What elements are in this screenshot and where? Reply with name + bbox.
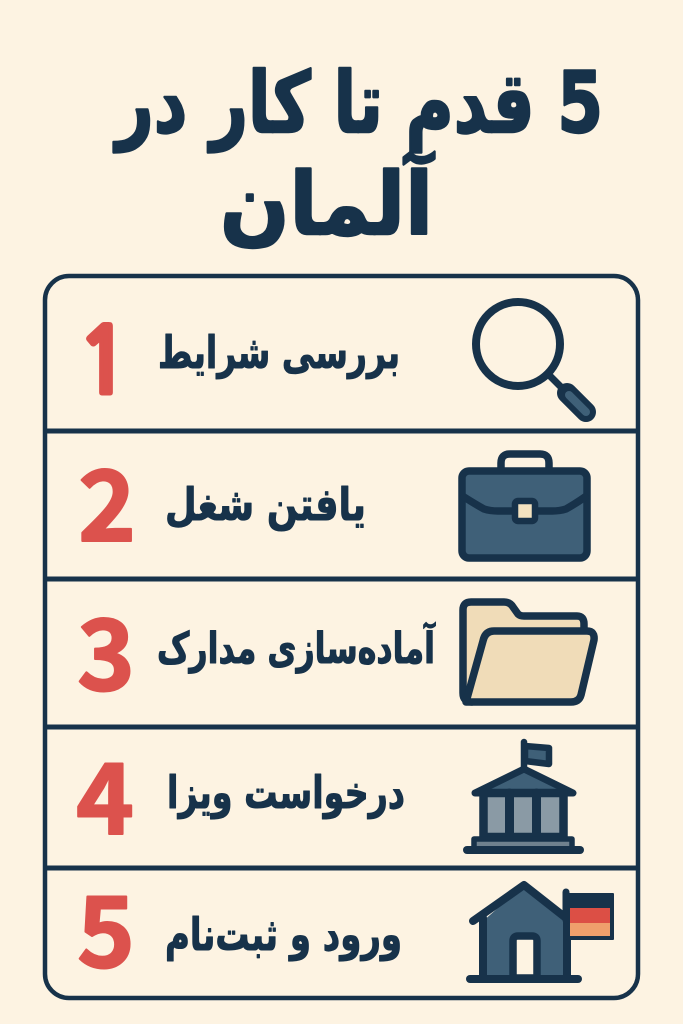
title: 5 قدم تا کار در: [113, 54, 603, 153]
step 4 number: 4: [76, 721, 134, 863]
title: [113, 54, 603, 255]
icon: house with German flag: [470, 885, 613, 979]
title: آلمان: [220, 152, 435, 255]
step 1 number: 1: [76, 316, 132, 407]
step 3 label: آماده‌سازی مدارک: [157, 622, 436, 674]
step 2 label: یافتن شغل: [165, 478, 366, 531]
panel: steps table: [45, 276, 638, 998]
step 3 number: 3: [77, 577, 135, 719]
step 2 number: 2: [78, 428, 136, 570]
icon: magnifying glass: [476, 302, 586, 412]
step 5 label: ورود و ثبت‌نام: [165, 908, 402, 961]
step 5 number: 5: [77, 854, 135, 996]
step 1 label: بررسی شرایط: [158, 326, 400, 379]
step 4 label: درخواست ویزا: [167, 766, 405, 819]
icon: folder: [463, 602, 594, 702]
icon: government building: [467, 742, 580, 850]
icon: briefcase: [462, 454, 587, 558]
